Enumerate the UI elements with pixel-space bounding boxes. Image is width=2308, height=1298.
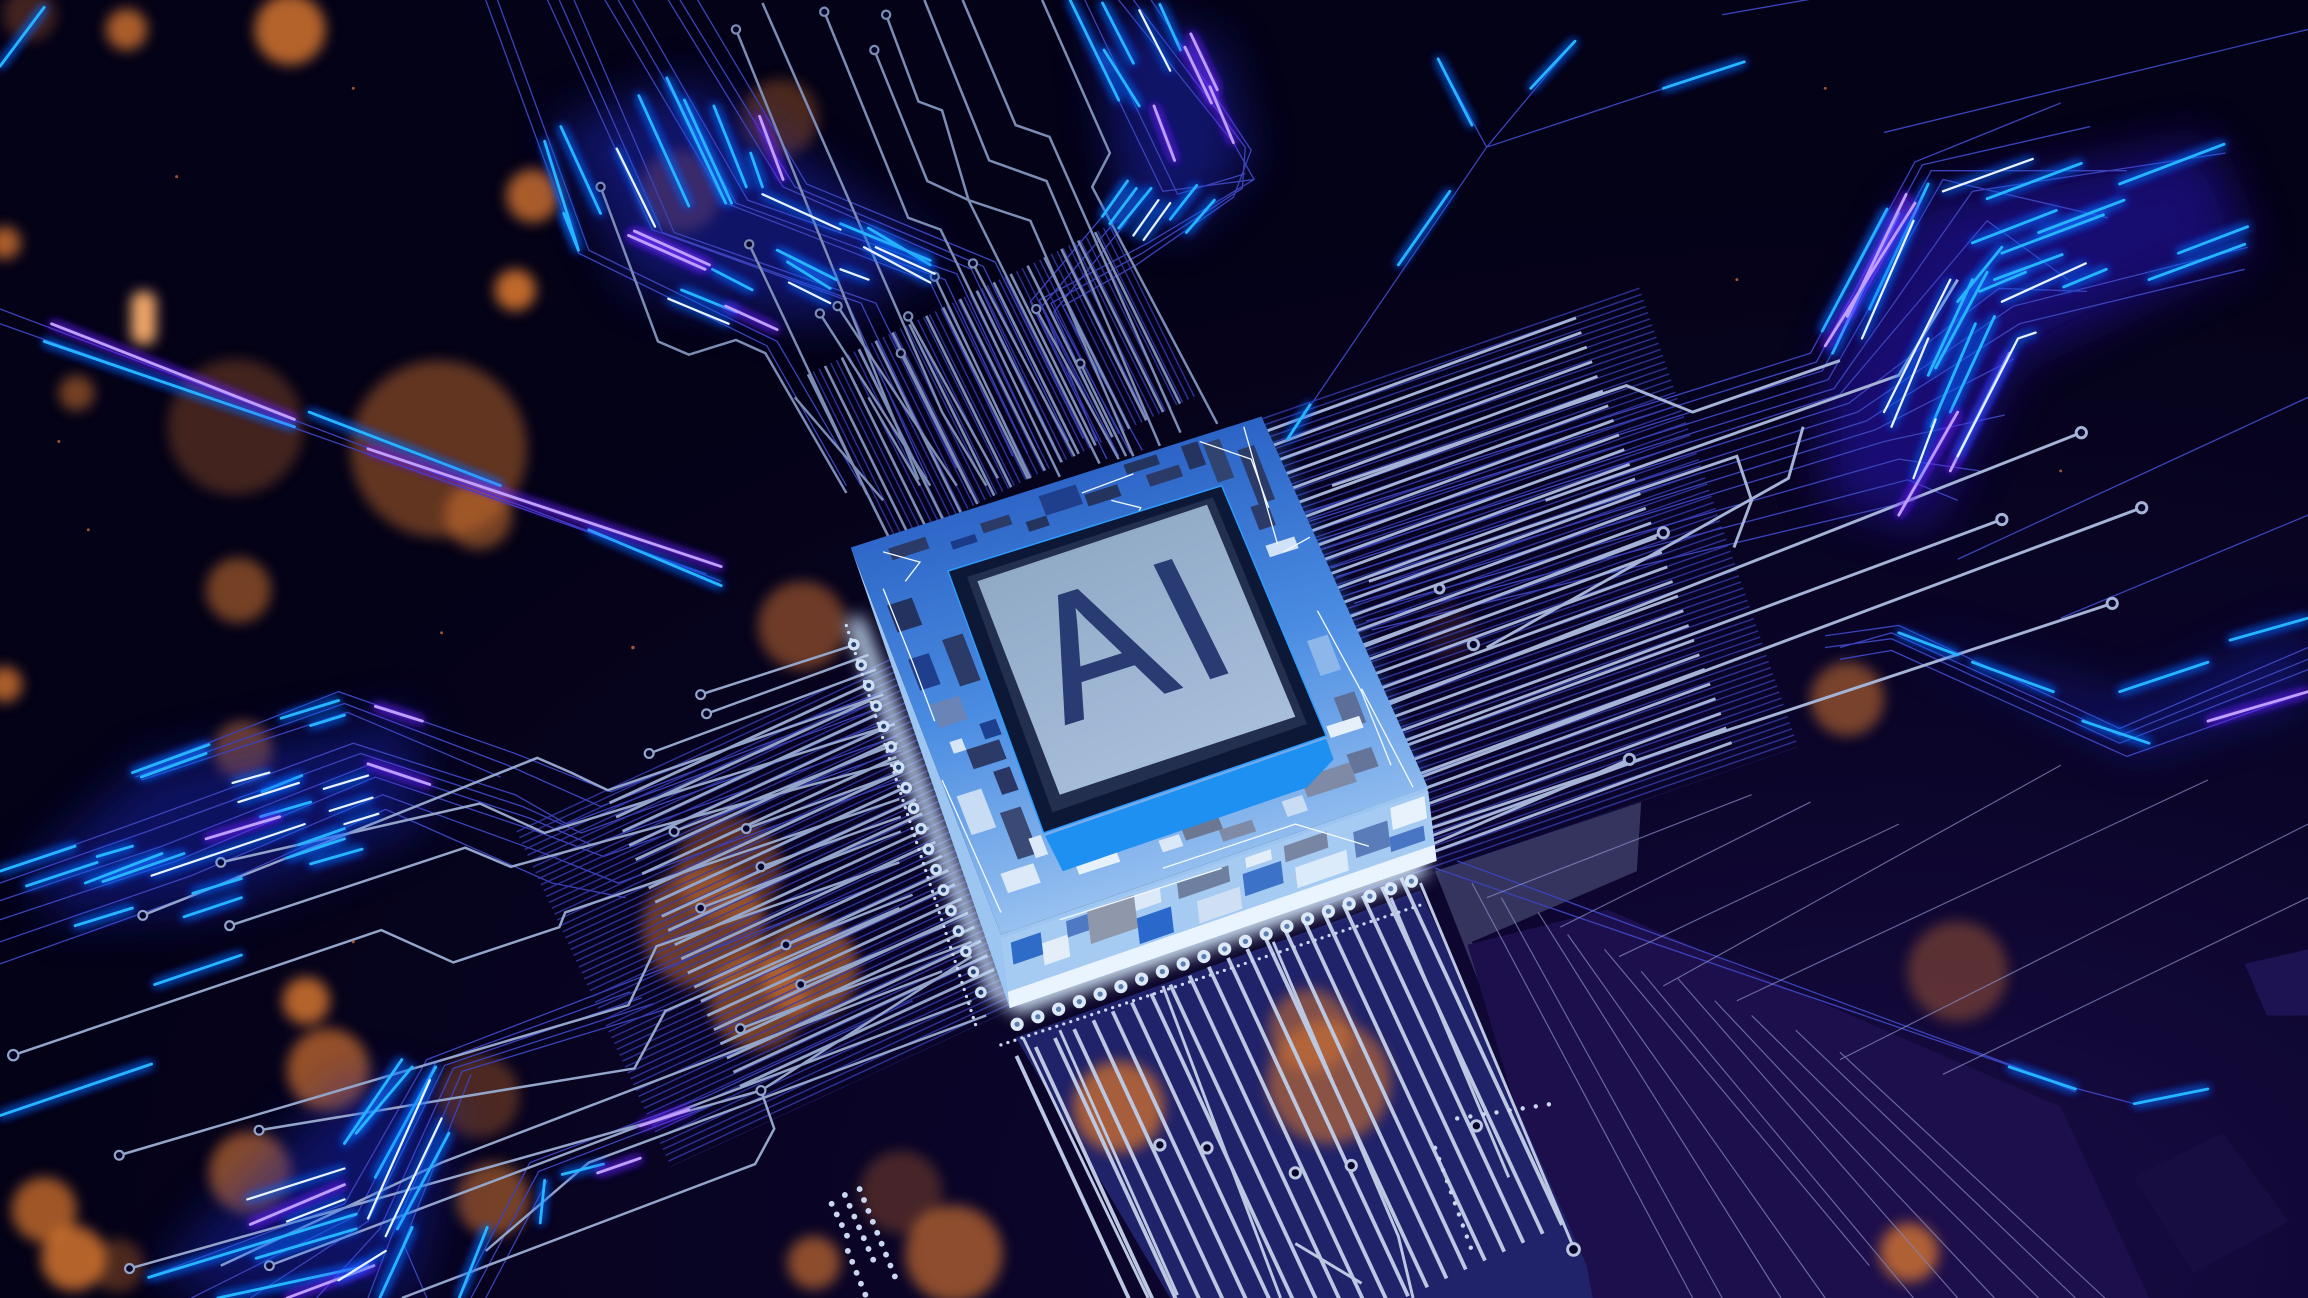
- chip pads: left and bottom rows: [854, 645, 1415, 1024]
- chip top rim: [851, 416, 1428, 935]
- chip label AI: AI: [992, 520, 1260, 759]
- dense blue trace underlay on four sides: [717, 311, 1562, 1074]
- bright traces: bottom side: [1023, 883, 1579, 1298]
- dotted via rows: [832, 625, 1553, 1295]
- chip front mosaic: [1001, 791, 1437, 1008]
- chip rim mosaic: [860, 424, 1392, 913]
- chip: [851, 416, 1437, 1024]
- grey traces: top side: [596, 0, 1217, 500]
- panel: purple board shapes lower right: [1435, 802, 2308, 1298]
- thin pale lines on the purple board: [1472, 765, 2308, 1298]
- bright traces: right side: [1332, 280, 2147, 846]
- grey traces: left side: [8, 645, 986, 1298]
- chip die: [977, 505, 1295, 795]
- star specks: [57, 87, 2062, 943]
- panel: blue board under bottom traces: [1016, 890, 1593, 1298]
- chip package recess: [948, 486, 1326, 833]
- chip glow: [854, 427, 1425, 1004]
- chip front face: [851, 547, 1428, 1008]
- chip pin ring: [967, 497, 1307, 812]
- chip bright blue glow strip: [1045, 739, 1334, 871]
- chip rim highlights: [883, 427, 1413, 920]
